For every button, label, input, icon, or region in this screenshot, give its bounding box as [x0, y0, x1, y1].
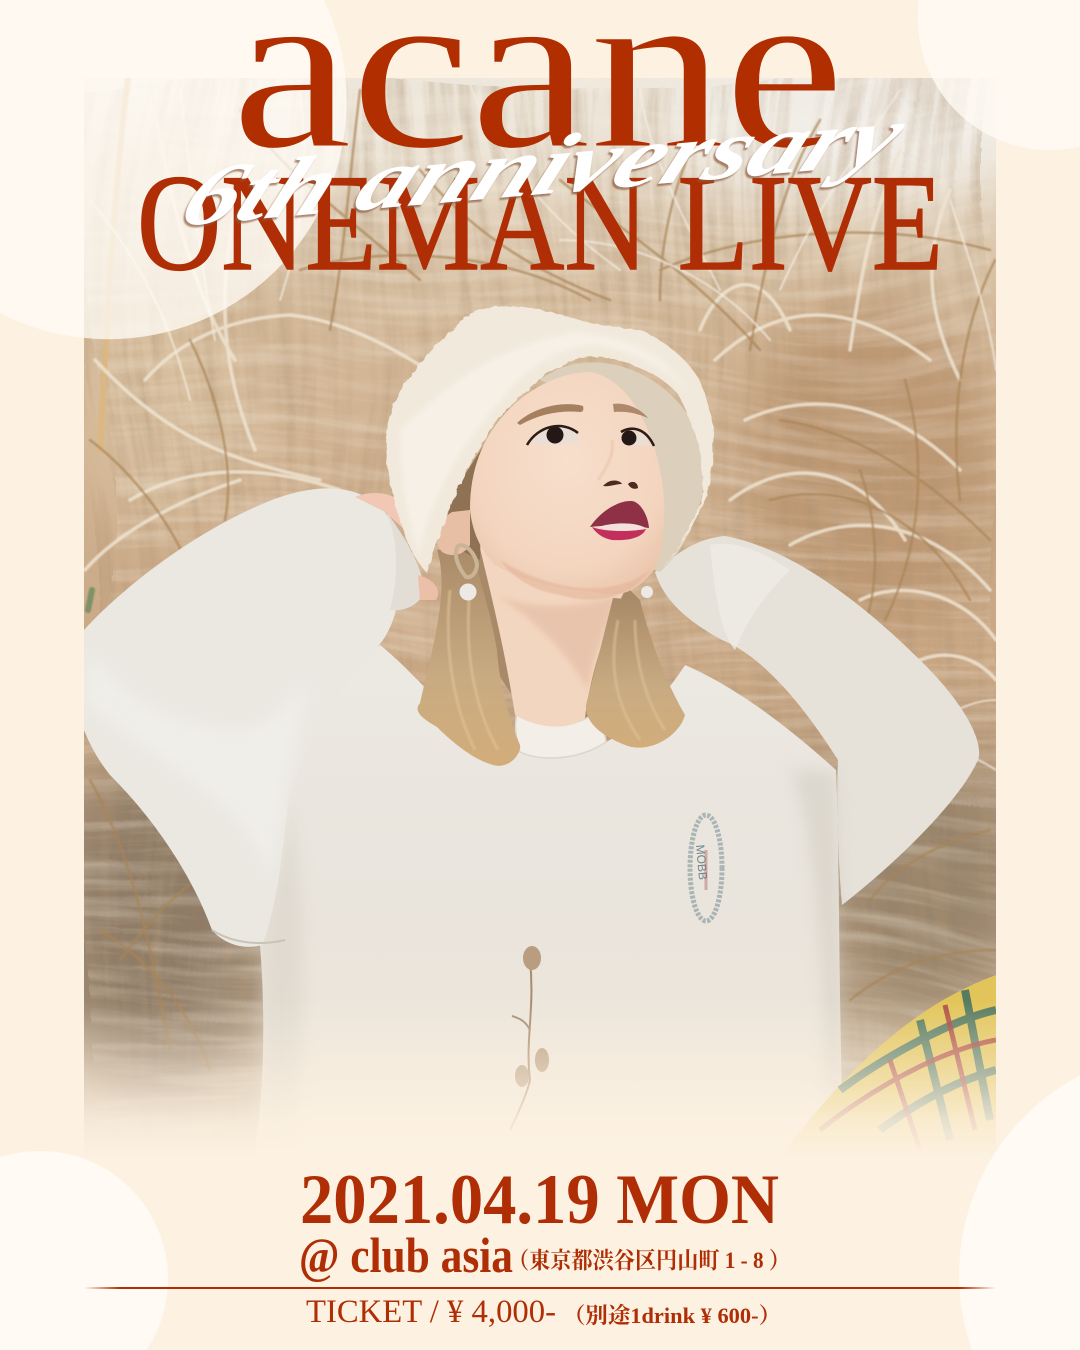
sweater: right sleeve — [655, 536, 979, 905]
decorative circle: top left — [0, 0, 347, 339]
hair: left — [418, 545, 520, 766]
eyes — [531, 428, 578, 445]
subtitle: 6th anniversary: 6th anniversary — [168, 86, 922, 246]
venue — [299, 1227, 790, 1283]
dried flower stem — [510, 946, 549, 1130]
photo backdrop: dried grass — [60, 70, 1040, 1158]
decorative circle: top right — [918, 0, 1080, 150]
ticket price — [306, 1294, 781, 1330]
hat: underside — [540, 362, 705, 572]
hair: right — [586, 598, 685, 748]
photo: singer in a field of pampas grass — [60, 70, 1040, 1170]
ear — [437, 510, 470, 555]
event date: 2021.04.19 MON — [300, 1161, 779, 1239]
hair under hat — [448, 446, 484, 560]
drink note: （別途1drink ¥ 600-） — [563, 1303, 781, 1328]
plaid skirt — [792, 975, 996, 1143]
title: ONEMAN LIVE: ONEMAN LIVE — [137, 146, 943, 299]
divider line — [84, 1287, 996, 1289]
venue address: （東京都渋谷区円山町 1 - 8 ） — [508, 1248, 790, 1273]
sweater logo — [690, 815, 722, 921]
sweater logo: MOBB — [693, 844, 710, 880]
grass stalks — [85, 78, 996, 1070]
ticket price: TICKET / ¥ 4,000- — [306, 1294, 556, 1330]
collar — [516, 714, 606, 758]
face — [470, 372, 664, 595]
hair behind neck — [478, 549, 640, 718]
eyebrows — [517, 404, 583, 425]
singer — [84, 306, 996, 1170]
photo fade into background — [84, 1000, 996, 1160]
hat — [386, 306, 714, 573]
neck — [478, 540, 625, 727]
decorative circle: bottom left — [0, 1151, 168, 1350]
hand — [355, 493, 405, 530]
lips — [590, 501, 649, 528]
decorative circle: bottom right — [959, 1076, 1080, 1350]
sweater: torso — [252, 645, 844, 1170]
earring — [456, 545, 477, 577]
sweater: left sleeve — [84, 488, 400, 947]
sweater: left cuff — [386, 514, 422, 610]
nose — [603, 480, 638, 489]
venue: @ club asia — [299, 1227, 513, 1283]
